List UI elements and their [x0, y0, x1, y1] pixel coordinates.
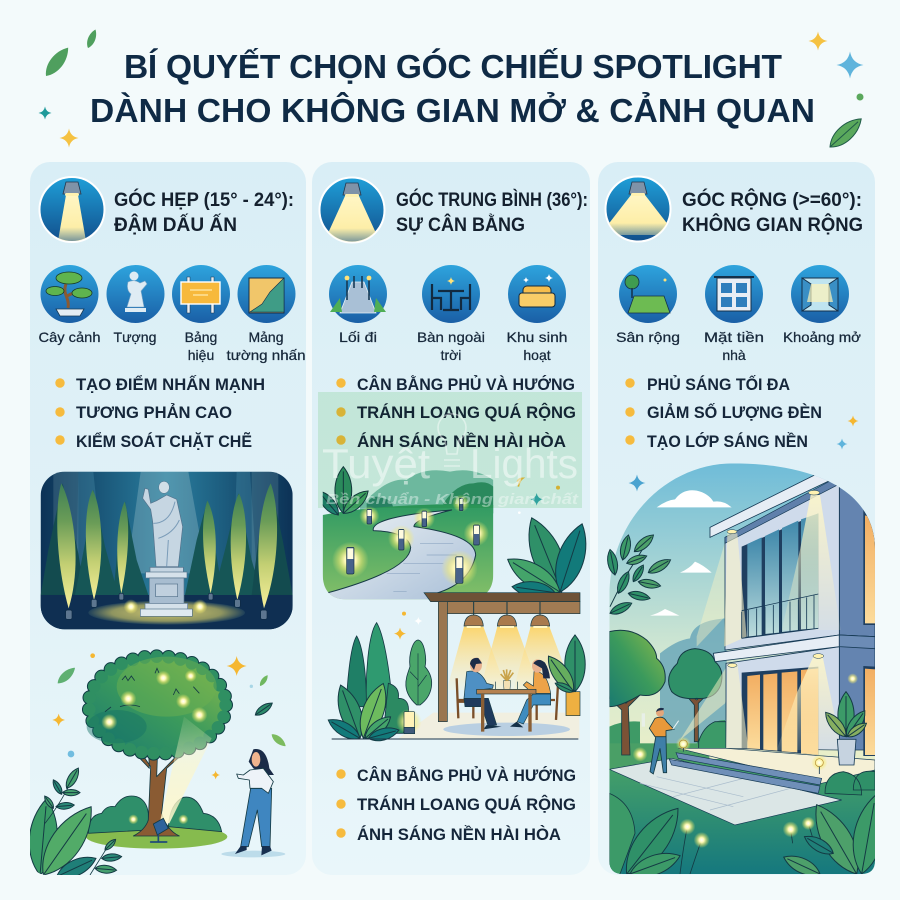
bullet list: narrow angle: TẠO ĐIỂM NHẤN MẠNH — [76, 375, 265, 394]
watermark: TuyetLights: Bền chuẩn - Không gian chất — [326, 491, 579, 508]
bullet list: wide angle: PHỦ SÁNG TỐI ĐA — [647, 374, 790, 394]
heading: wide angle: KHÔNG GIAN RỘNG — [682, 214, 863, 236]
bullet list: wide angle — [625, 374, 822, 451]
watermark: TuyetLights — [318, 392, 582, 508]
labels: wide angle uses: Sân rộng — [616, 329, 680, 345]
icon: medium beam spotlight — [320, 178, 384, 242]
illustration: lit garden pathway — [314, 467, 560, 600]
labels: wide angle uses: Mặt tiền — [704, 329, 764, 345]
heading: medium angle: SỰ CÂN BẰNG — [396, 214, 525, 236]
illustration: plant beside pergola — [502, 512, 594, 601]
bullet list: wide angle: TẠO LỚP SÁNG NỀN — [647, 432, 808, 451]
title: BÍ QUYẾT CHỌN GÓC CHIẾU SPOTLIGHT — [124, 48, 783, 86]
labels: medium angle uses: Khu sinh — [506, 329, 568, 345]
labels: medium angle uses — [339, 329, 568, 363]
bullet list: medium angle: ÁNH SÁNG NỀN HÀI HÒA — [357, 432, 566, 451]
heading: medium angle — [396, 189, 588, 236]
labels: wide angle uses: nhà — [722, 347, 746, 363]
bullet list: medium angle repeated — [336, 766, 576, 844]
bullet list: medium angle: CÂN BẰNG PHỦ VÀ HƯỚNG — [357, 375, 575, 394]
labels: narrow angle uses: Bảng — [185, 329, 217, 345]
heading: narrow angle: GÓC HẸP (15° - 24°): — [114, 189, 294, 211]
labels: wide angle uses — [616, 329, 861, 363]
icon: large lawn — [619, 265, 677, 323]
panel: narrow angle — [26, 162, 306, 884]
bullet list: narrow angle — [55, 375, 265, 451]
labels: medium angle uses: hoạt — [523, 347, 551, 363]
icon: accent wall — [238, 265, 296, 323]
illustration: dining under pergola — [325, 593, 585, 744]
heading: wide angle — [682, 189, 863, 236]
bullet list: medium angle: TRÁNH LOANG QUÁ RỘNG — [357, 403, 576, 422]
sparkle decorations — [628, 416, 858, 492]
heading: medium angle: GÓC TRUNG BÌNH (36°): — [396, 189, 588, 211]
illustration: tree with uplight and woman — [52, 653, 288, 857]
icon: statue — [106, 265, 164, 323]
icon: wide beam spotlight — [600, 176, 676, 242]
icon: bonsai — [40, 265, 98, 323]
illustration: statue among lit cypress trees — [41, 472, 293, 629]
heading: narrow angle: ĐẬM DẤU ẤN — [114, 214, 237, 236]
bullet list: narrow angle: KIỂM SOÁT CHẶT CHẼ — [76, 431, 252, 451]
labels: narrow angle uses: Tượng — [114, 329, 156, 345]
icon: open window — [791, 265, 849, 323]
panel: wide angle — [598, 162, 890, 883]
icon: pathway — [329, 265, 387, 323]
title — [90, 48, 815, 130]
icon: living area — [508, 265, 566, 323]
watermark: TuyetLights: Tuyệt — [322, 440, 430, 487]
illustration: lit modern house — [605, 463, 890, 883]
heading: wide angle: GÓC RỘNG (>=60°): — [682, 189, 862, 211]
title: DÀNH CHO KHÔNG GIAN MỞ & CẢNH QUAN — [90, 91, 815, 130]
labels: medium angle uses: trời — [441, 347, 461, 363]
icon: signboard — [172, 265, 230, 323]
watermark: TuyetLights: Lights — [470, 440, 578, 487]
labels: narrow angle uses: Mảng — [248, 329, 284, 345]
labels: medium angle uses: Lối đi — [339, 329, 377, 345]
icon: narrow beam spotlight — [40, 177, 104, 242]
foliage: bottom left leaves — [30, 767, 122, 875]
bullet list: narrow angle: TƯƠNG PHẢN CAO — [76, 403, 232, 422]
bullet list: medium angle — [336, 375, 576, 451]
icon: outdoor table — [422, 265, 480, 323]
heading: narrow angle — [114, 189, 294, 236]
labels: narrow angle uses — [38, 329, 306, 363]
labels: narrow angle uses: Cây cảnh — [38, 329, 100, 345]
labels: wide angle uses: Khoảng mở — [783, 329, 861, 345]
bullet list: medium angle repeated: CÂN BẰNG PHỦ VÀ HƯỚNG — [357, 766, 576, 785]
labels: medium angle uses: Bàn ngoài — [417, 329, 485, 345]
panel: medium angle — [312, 162, 594, 875]
header decorations — [38, 28, 866, 153]
icon: building facade — [705, 265, 763, 323]
labels: narrow angle uses: hiệu — [188, 347, 214, 363]
bullet list: medium angle repeated: ÁNH SÁNG NỀN HÀI HÒA — [357, 825, 561, 844]
bullet list: medium angle repeated: TRÁNH LOANG QUÁ RỘNG — [357, 795, 576, 814]
labels: narrow angle uses: tường nhấn — [226, 347, 306, 363]
bullet list: wide angle: GIẢM SỐ LƯỢNG ĐÈN — [647, 402, 822, 422]
